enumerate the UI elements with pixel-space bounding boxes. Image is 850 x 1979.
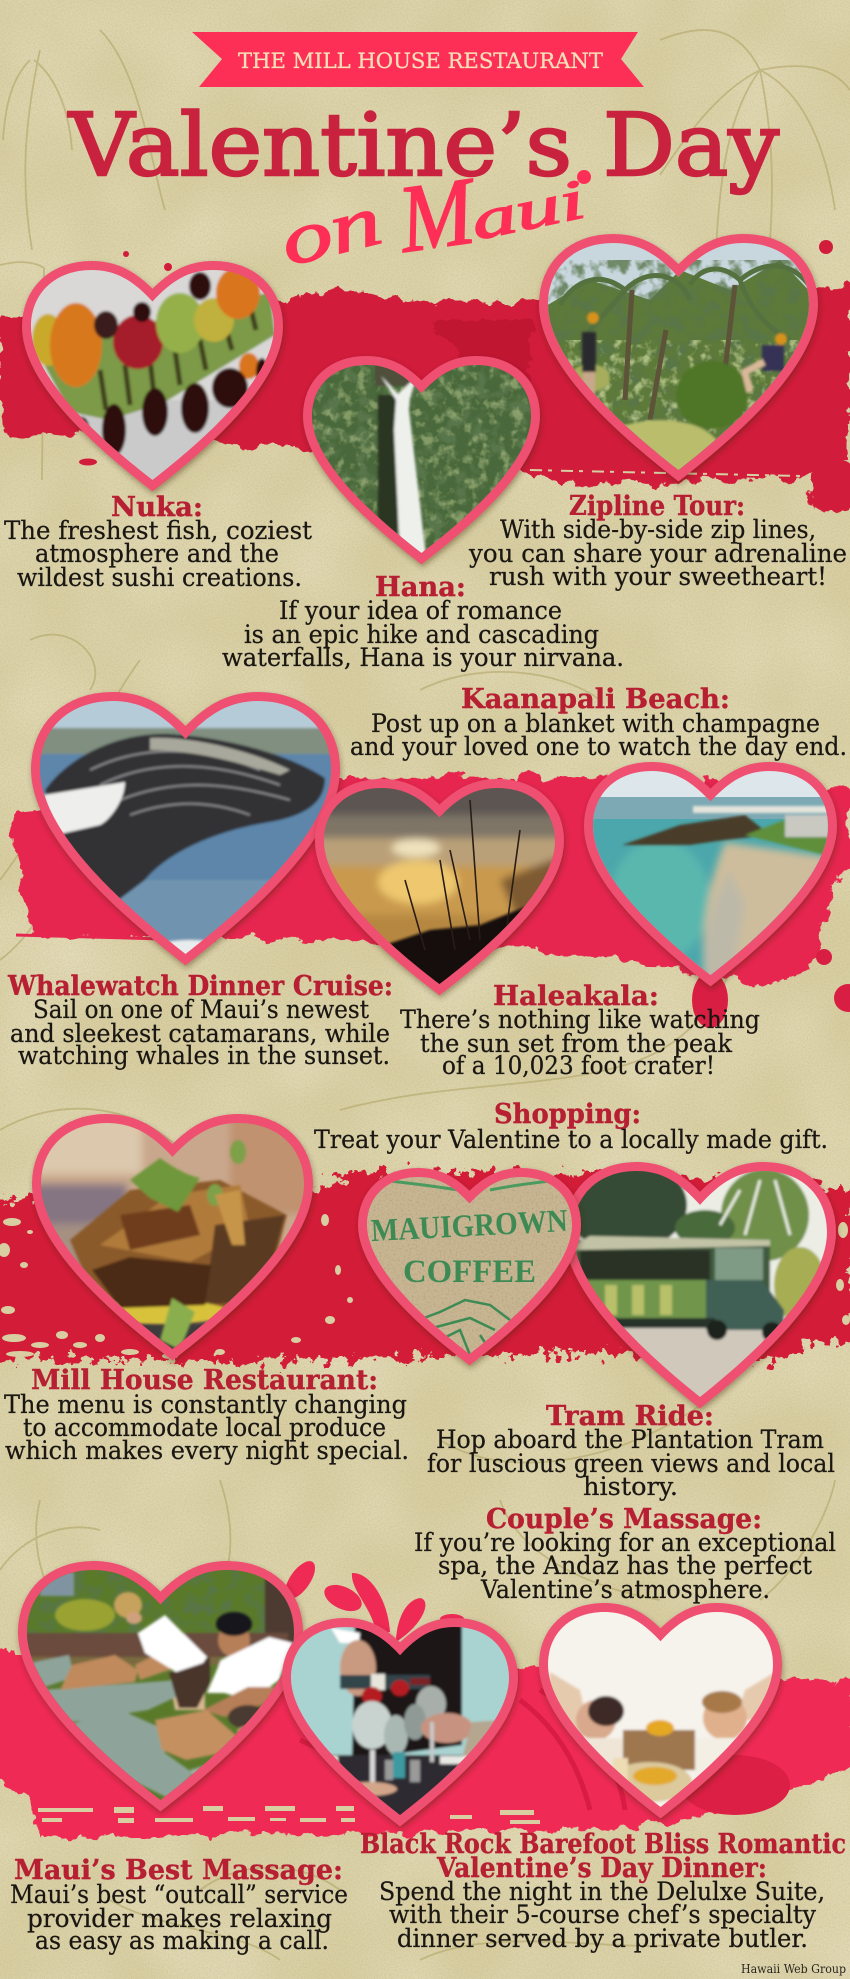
text: Tram Ride: Tram Ride: xyxy=(546,1401,714,1432)
text: Mill House Restaurant: to accommodate local produce xyxy=(23,1413,386,1442)
text: Mill House Restaurant: The menu is constantly changing xyxy=(4,1390,407,1419)
text: Couple's Massage: If you’re looking for an exceptional xyxy=(414,1528,836,1557)
text: Black Rock Barefoot Bliss: Spend the night in the Delulxe Suite, xyxy=(379,1877,825,1906)
text: Tram Ride: for luscious green views and local xyxy=(427,1449,835,1478)
text: Zipline Tour: With side-by-side zip lines, xyxy=(500,515,816,544)
title: Valentine's Day: Day xyxy=(603,96,779,196)
text: Hana: If your idea of romance xyxy=(279,596,562,625)
text: Black Rock Barefoot Bliss: dinner served by a private butler. xyxy=(397,1924,808,1953)
banner: The Mill House Restaurant: THE MILL HOUSE RESTAURANT xyxy=(238,49,603,73)
text: Whalewatch Dinner Cruise: and sleekest catamarans, while xyxy=(10,1019,390,1048)
text: Black Rock Barefoot Bliss xyxy=(360,1829,846,1953)
subtitle: on Maui: M xyxy=(390,156,485,273)
text: Mill House Restaurant xyxy=(4,1365,409,1465)
text: Couple's Massage: Valentine’s atmosphere. xyxy=(480,1575,770,1604)
text: Mill House Restaurant: which makes every night special. xyxy=(5,1436,409,1465)
heart photo: Maui-grown coffee sack: COFFEE xyxy=(403,1254,536,1290)
red paint band 4 with splash xyxy=(0,1556,850,1838)
text: Nuka: Nuka: xyxy=(111,492,203,523)
text: Haleakala: Haleakala: xyxy=(493,981,659,1012)
text: Black Rock Barefoot Bliss: Valentine’s Day Dinner: xyxy=(436,1853,767,1884)
heart photo: Mill House dish xyxy=(32,1114,313,1362)
text: Nuka: wildest sushi creations. xyxy=(17,563,302,592)
text: Zipline Tour: rush with your sweetheart! xyxy=(489,562,827,591)
text: Hana: Hana: xyxy=(375,572,466,603)
text: Whalewatch Dinner Cruise xyxy=(7,971,393,1070)
heart photo: wine dinner xyxy=(282,1618,518,1828)
text: Shopping xyxy=(314,1099,828,1154)
text: Kaanapali Beach: Post up on a blanket with champagne xyxy=(371,709,820,738)
heart photo: Maui-grown coffee sack xyxy=(358,1168,581,1367)
text: Tram Ride: Hop aboard the Plantation Tram xyxy=(436,1425,824,1454)
heart photo: couple's spa xyxy=(539,1603,782,1820)
text: Kaanapali Beach: Kaanapali Beach: xyxy=(461,684,730,715)
heart photo: Haleakala sunset xyxy=(315,779,564,997)
heart photo: Nuka sushi xyxy=(22,261,283,493)
heart photo: plantation tram xyxy=(563,1159,836,1410)
text: Zipline Tour xyxy=(468,491,847,591)
text: Nuka: The freshest fish, coziest xyxy=(4,516,312,545)
text: Whalewatch Dinner Cruise: watching whales in the sunset. xyxy=(18,1041,390,1070)
text: Tram Ride xyxy=(427,1401,835,1501)
text: Kaanapali Beach xyxy=(350,684,847,761)
text: Nuka xyxy=(4,492,312,592)
text: Hana: is an epic hike and cascading xyxy=(244,620,599,649)
text: Haleakala: There’s nothing like watching xyxy=(400,1005,760,1034)
text: Couple's Massage: Couple’s Massage: xyxy=(486,1504,762,1535)
text: Maui's Best Massage xyxy=(10,1855,348,1955)
text: Maui's Best Massage: as easy as making a call. xyxy=(35,1926,329,1955)
text: Haleakala xyxy=(400,981,760,1080)
heart photo: massage xyxy=(18,1561,303,1813)
subtitle: on Maui xyxy=(273,156,590,282)
subtitle: on Maui: aui xyxy=(466,168,590,253)
subtitle: on Maui: on xyxy=(273,180,389,282)
heart photo: Maui-grown coffee sack: MAUIGROWN xyxy=(370,1202,569,1248)
title: Valentine's Day xyxy=(68,96,779,196)
text: Maui's Best Massage: provider makes relaxing xyxy=(27,1904,332,1933)
text: Hana: waterfalls, Hana is your nirvana. xyxy=(222,643,624,672)
text: Haleakala: of a 10,023 foot crater! xyxy=(442,1051,715,1080)
red paint band 3 xyxy=(0,1172,850,1362)
red paint band 2 xyxy=(14,777,850,1028)
text: Whalewatch Dinner Cruise: Whalewatch Dinner Cruise: xyxy=(7,971,393,1002)
title: Valentine's Day: Valentine’s xyxy=(68,96,572,196)
text: Shopping: Shopping: xyxy=(494,1099,641,1130)
heart photo: zipline tour xyxy=(539,234,818,483)
banner: The Mill House Restaurant xyxy=(192,32,644,87)
text: Maui's Best Massage: Maui’s Best Massage: xyxy=(14,1855,343,1886)
red paint band 1 xyxy=(0,240,850,514)
text: Tram Ride: history. xyxy=(583,1472,678,1501)
text: Zipline Tour: Zipline Tour: xyxy=(569,491,745,522)
text: Hana xyxy=(222,572,624,672)
text: Black Rock Barefoot Bliss: with their 5-course chef’s specialty xyxy=(389,1900,817,1929)
heart photo: Hana waterfall xyxy=(303,356,540,570)
text: Zipline Tour: you can share your adrenaline xyxy=(468,539,847,568)
text: Nuka: atmosphere and the xyxy=(35,539,279,568)
heart photo: whale breach xyxy=(31,692,340,967)
text: Whalewatch Dinner Cruise: Sail on one of Maui’s newest xyxy=(33,995,369,1024)
text: Couple's Massage xyxy=(414,1504,836,1604)
text: Haleakala: the sun set from the peak xyxy=(420,1029,733,1058)
text: Couple's Massage: spa, the Andaz has the perfect xyxy=(438,1551,812,1580)
text: Maui's Best Massage: Maui’s best “outcall” service xyxy=(10,1880,348,1909)
heart photo: Kaanapali beach xyxy=(584,762,837,988)
text: Shopping: Treat your Valentine to a locally made gift. xyxy=(314,1125,828,1154)
text: Mill House Restaurant: Mill House Restaurant: xyxy=(31,1365,378,1396)
